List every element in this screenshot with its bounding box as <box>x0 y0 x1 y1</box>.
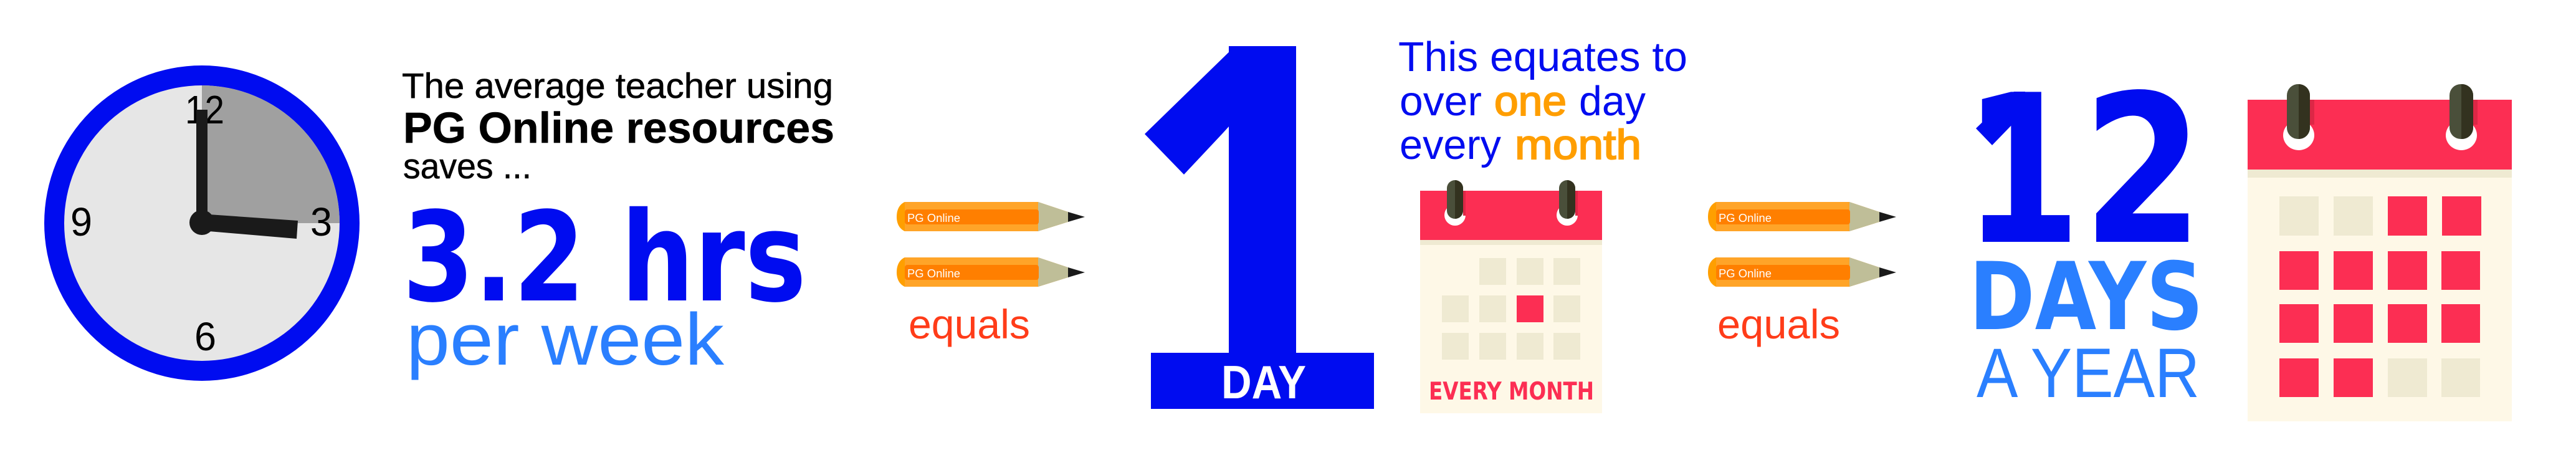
pencils equals sign: left: PG Online <box>907 267 960 280</box>
pencils equals sign: left <box>897 202 1085 287</box>
calendar: twelve days <box>2248 84 2512 421</box>
text: this equates to over one day every month: month <box>1515 122 1641 168</box>
intro text: saves ... <box>403 146 532 186</box>
pencils equals sign: right: PG Online <box>1719 267 1772 280</box>
clock: numerals: 12 <box>185 87 224 132</box>
text: this equates to over one day every month: day <box>1579 78 1646 125</box>
big 1 day: DAY <box>1221 356 1306 408</box>
equals label: right: equals <box>1717 301 1840 347</box>
headline: 3.2 hrs per week <box>403 185 806 381</box>
clock: numerals: 9 <box>70 199 92 244</box>
text: this equates to over one day every month: This equates to <box>1398 34 1687 80</box>
headline: 12 days a year: 1 <box>1963 51 2081 290</box>
calendar: every month: EVERY MONTH <box>1429 378 1594 406</box>
intro text <box>402 66 834 186</box>
intro text: The average teacher using <box>402 66 833 106</box>
headline: 12 days a year <box>1963 51 2203 412</box>
text: this equates to over one day every month <box>1398 34 1687 168</box>
clock: shaded quarter <box>202 85 340 223</box>
intro text: PG Online resources <box>403 103 834 152</box>
clock: numerals: 6 <box>194 314 216 359</box>
clock <box>44 65 360 381</box>
headline: 12 days a year: 2 <box>2082 51 2203 290</box>
pencils equals sign: right <box>1708 202 1896 287</box>
pencils equals sign: right: PG Online <box>1719 212 1772 224</box>
clock: numerals <box>70 87 332 359</box>
clock: numerals: 3 <box>310 199 332 244</box>
text: this equates to over one day every month: every <box>1400 122 1501 168</box>
pencils equals sign: left: PG Online <box>907 212 960 224</box>
calendar: every month <box>1420 180 1602 413</box>
headline: 12 days a year: A YEAR <box>1977 334 2200 412</box>
equals label: left: equals <box>909 301 1030 347</box>
headline: 12 days a year: DAYS <box>1969 243 2203 352</box>
headline: 3.2 hrs per week: 3.2 hrs <box>403 185 806 330</box>
clock: hands <box>189 110 298 239</box>
text: this equates to over one day every month: one <box>1494 78 1567 125</box>
text: this equates to over one day every month: over <box>1400 78 1482 125</box>
headline: 3.2 hrs per week: per week <box>406 299 725 381</box>
